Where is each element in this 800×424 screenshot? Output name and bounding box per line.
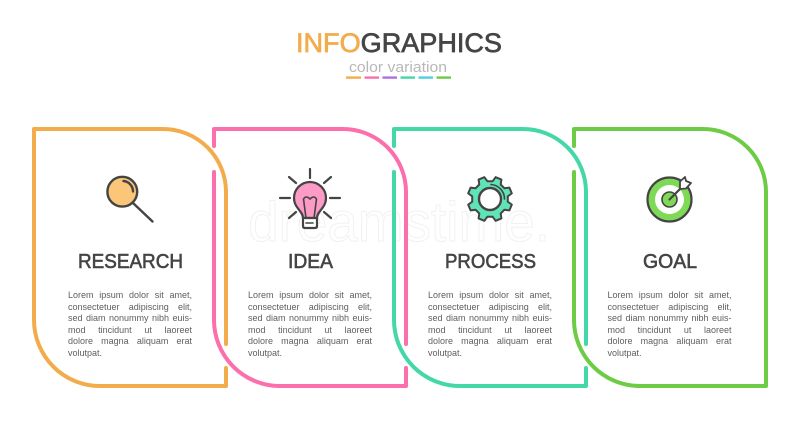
subtitle: color variation <box>349 60 447 76</box>
outline: orange card <box>34 129 226 386</box>
text block: idea: sed diam nonummy nibh euis- <box>248 313 372 323</box>
heading: infographics: INFOGRAPHICS <box>296 28 502 58</box>
text block: research: mod tincidunt ut laoreet <box>68 325 192 335</box>
heading: process: PROCESS <box>445 251 536 273</box>
text block: goal <box>608 290 732 358</box>
text block: process: sed diam nonummy nibh euis- <box>428 313 552 323</box>
text block: idea <box>248 290 372 358</box>
icon: light bulb <box>280 169 340 228</box>
text block: process: mod tincidunt ut laoreet <box>428 325 552 335</box>
text block: process: volutpat. <box>428 348 462 358</box>
panel: research <box>32 127 228 388</box>
icon: magnifying glass <box>107 177 152 222</box>
text block: idea: Lorem ipsum dolor sit amet, <box>248 290 372 300</box>
text block: idea: volutpat. <box>248 348 282 358</box>
text block: research: consectetuer adipiscing elit, <box>68 302 192 312</box>
text block: process: Lorem ipsum dolor sit amet, <box>428 290 552 300</box>
colour legend <box>346 76 451 79</box>
text block: research: dolore magna aliquam erat <box>68 336 192 346</box>
outline: green card <box>574 129 766 386</box>
icon: gear <box>468 177 512 221</box>
text block: research: sed diam nonummy nibh euis- <box>68 313 192 323</box>
text block: goal: volutpat. <box>608 348 642 358</box>
text block: research <box>68 290 192 358</box>
text block: idea: mod tincidunt ut laoreet <box>248 325 372 335</box>
text block: research: volutpat. <box>68 348 102 358</box>
text block: goal: Lorem ipsum dolor sit amet, <box>608 290 732 300</box>
text block: process <box>428 290 552 358</box>
panel: process <box>392 127 588 388</box>
text block: goal: consectetuer adipiscing elit, <box>608 302 732 312</box>
text block: idea: consectetuer adipiscing elit, <box>248 302 372 312</box>
title <box>296 28 502 79</box>
text block: idea: dolore magna aliquam erat <box>248 336 372 346</box>
outline: pink card <box>214 129 406 386</box>
text block: process: consectetuer adipiscing elit, <box>428 302 552 312</box>
panel: idea <box>212 127 408 388</box>
text block: goal: sed diam nonummy nibh euis- <box>608 313 732 323</box>
text block: goal: dolore magna aliquam erat <box>608 336 732 346</box>
text block: goal: mod tincidunt ut laoreet <box>608 325 732 335</box>
text block: research: Lorem ipsum dolor sit amet, <box>68 290 192 300</box>
heading: research: RESEARCH <box>78 251 183 273</box>
panel: goal <box>572 127 768 388</box>
outline: teal card <box>394 129 586 386</box>
heading: goal: GOAL <box>643 251 697 273</box>
text block: process: dolore magna aliquam erat <box>428 336 552 346</box>
icon: target with dart <box>648 177 692 222</box>
heading: idea: IDEA <box>288 251 334 273</box>
